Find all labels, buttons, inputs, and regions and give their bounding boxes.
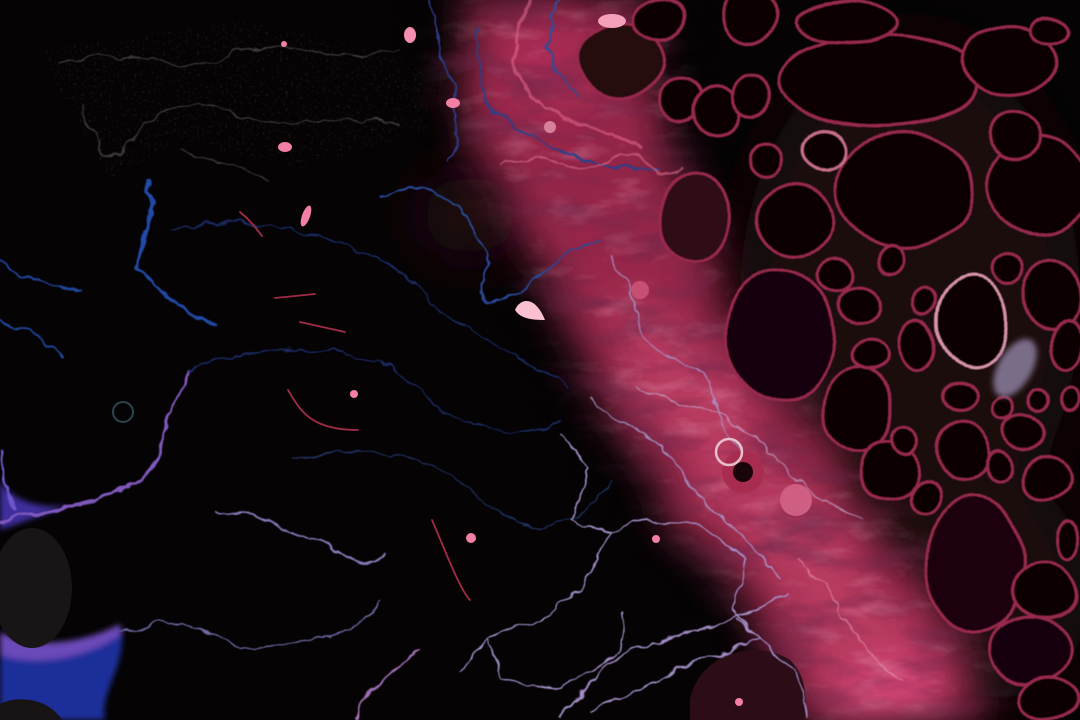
upper band swirl strokes xyxy=(380,0,900,680)
lilac veins lower centre xyxy=(460,430,810,718)
cells: large bubble network at right xyxy=(576,0,1080,718)
eye-shaped bubble xyxy=(113,402,812,516)
dust: grey speckled trail top-left xyxy=(46,20,427,176)
rock-like cell bottom-left xyxy=(0,528,72,720)
lilac patch among the bubbles xyxy=(984,332,1046,404)
maroon pool in lower centre xyxy=(690,650,806,720)
right side maroon haze xyxy=(420,40,1080,700)
pink paint flecks xyxy=(278,14,743,706)
faint red streaks on the dark left area xyxy=(240,212,470,600)
blue pool bottom-left xyxy=(0,480,122,720)
grey swirl lines xyxy=(60,46,400,180)
marbled textures in the band xyxy=(424,0,1009,719)
left veins: purple and blue xyxy=(0,180,610,718)
pink diagonal band xyxy=(450,0,995,720)
